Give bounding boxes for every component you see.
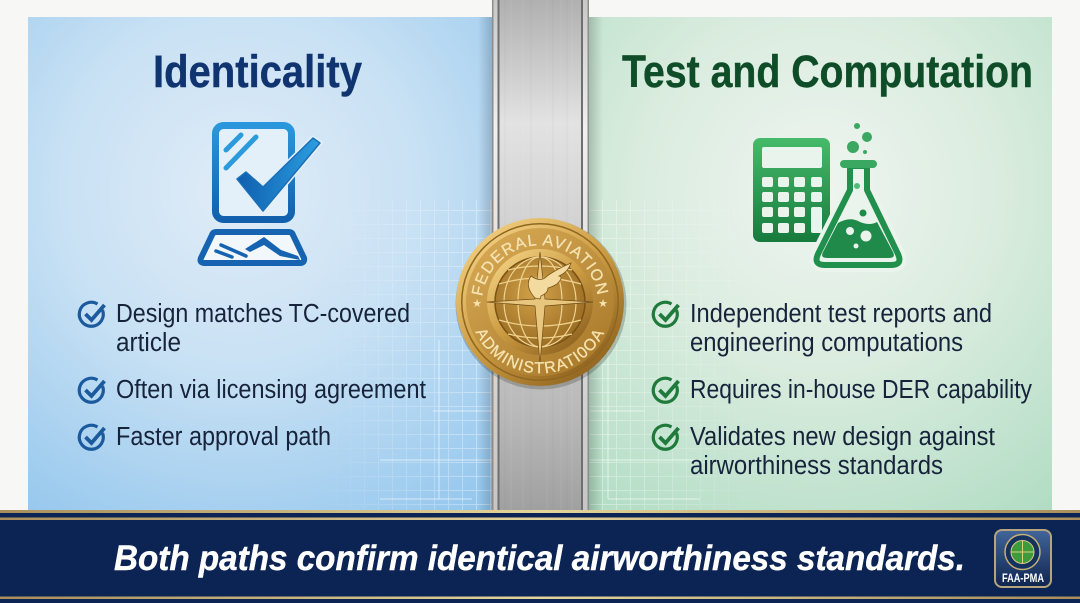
bullet text: independent test reports: Independent test reports and	[690, 300, 992, 328]
FAA-PMA badge	[995, 530, 1051, 587]
FAA gold seal: ★	[598, 298, 608, 310]
bullet text: faster: Faster approval path	[116, 423, 331, 451]
icon: check bullet	[653, 425, 678, 449]
bullet text: DER capability: Requires in-house DER capability	[690, 376, 1032, 404]
bullet text: design matches: Design matches TC-covered	[116, 300, 410, 328]
bullet text: validates new design: airworthiness standards	[690, 452, 943, 480]
metal divider bar	[492, 0, 589, 511]
bullet text: design matches	[116, 300, 410, 357]
FAA gold seal: FEDERAL AVIATION	[472, 234, 608, 296]
panel: test and computation	[588, 17, 1052, 510]
FAA gold seal	[456, 218, 626, 390]
FAA-PMA badge: FAA-PMA	[1002, 571, 1044, 585]
bullet text: design matches: article	[116, 329, 181, 357]
FAA gold seal: ★	[472, 298, 482, 310]
panel: identicality	[28, 17, 493, 510]
icon: check bullet	[79, 425, 104, 449]
icon: check bullet	[653, 302, 678, 326]
bullet list: test and computation	[653, 300, 1032, 480]
banner statement: Both paths confirm identical airworthiness standards.	[114, 539, 965, 578]
icon: check bullet	[79, 378, 104, 402]
icon: tablet with checkmark	[200, 126, 320, 263]
bullet text: licensing: Often via licensing agreement	[116, 376, 426, 404]
heading: identicality: Identicality	[153, 46, 362, 97]
bullet text: validates new design	[690, 423, 995, 480]
bullet text: validates new design: Validates new design against	[690, 423, 995, 451]
bullet text: independent test reports: engineering computations	[690, 329, 963, 357]
bottom banner	[0, 510, 1080, 603]
bullet text: independent test reports	[690, 300, 992, 357]
bullet list: identicality	[79, 300, 426, 451]
icon: calculator and flask	[753, 123, 899, 265]
heading: test and computation: Test and Computation	[622, 46, 1033, 97]
icon: check bullet	[653, 378, 678, 402]
FAA gold seal: ADMINISTRATI0OA	[475, 330, 604, 374]
icon: check bullet	[79, 302, 104, 326]
